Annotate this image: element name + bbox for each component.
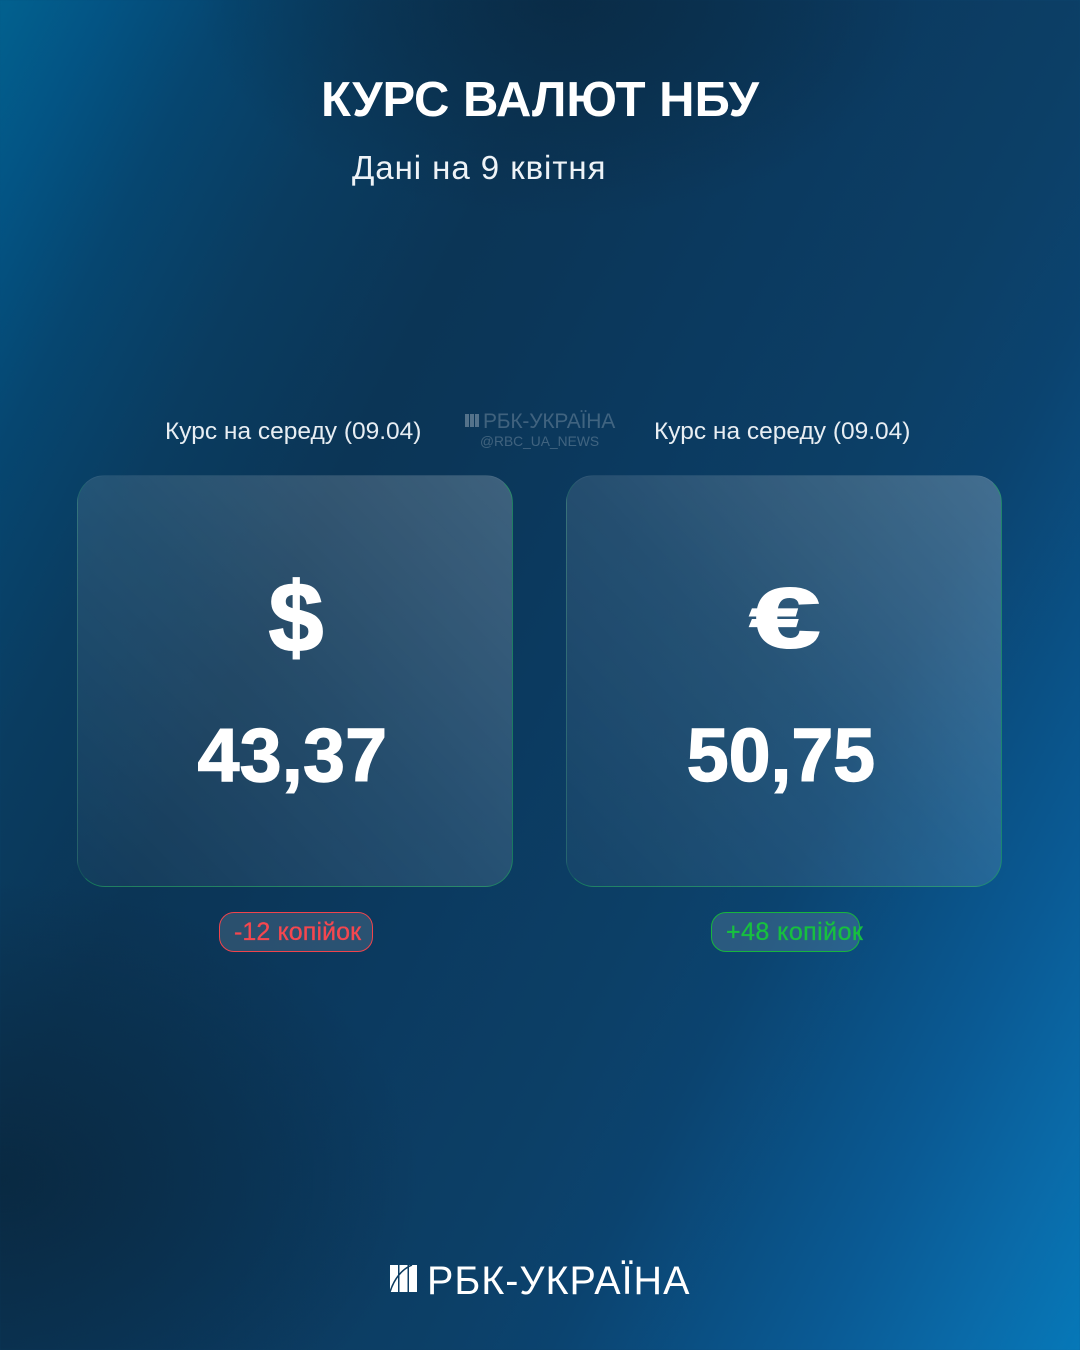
panel: EUR: [566, 475, 1002, 887]
icon: watermark logo: [465, 414, 479, 427]
badge: USD change: [219, 912, 373, 952]
icon: dollar: $: [269, 562, 323, 672]
icon: euro: €: [750, 571, 820, 665]
title: КУРС ВАЛЮТ НБУ: [321, 73, 759, 127]
EUR change text: +48 копійок: [726, 918, 863, 946]
label: USD date: Курс на середу (09.04): [165, 418, 421, 445]
badge: EUR change: [711, 912, 860, 952]
watermark handle: @RBC_UA_NEWS: [480, 434, 599, 449]
footer logo: [390, 1259, 690, 1303]
watermark name: РБК-УКРАЇНА: [483, 410, 615, 433]
subtitle: Дані на 9 квітня: [352, 149, 606, 186]
USD rate: 43,37: [198, 713, 387, 797]
icon: logo mark: [390, 1265, 417, 1292]
watermark: [465, 410, 616, 449]
EUR rate: 50,75: [687, 713, 875, 797]
logo text: РБК-УКРАЇНА: [427, 1259, 690, 1303]
panel: USD: [77, 475, 513, 887]
USD change text: -12 копійок: [234, 918, 361, 946]
label: EUR date: Курс на середу (09.04): [654, 418, 910, 445]
